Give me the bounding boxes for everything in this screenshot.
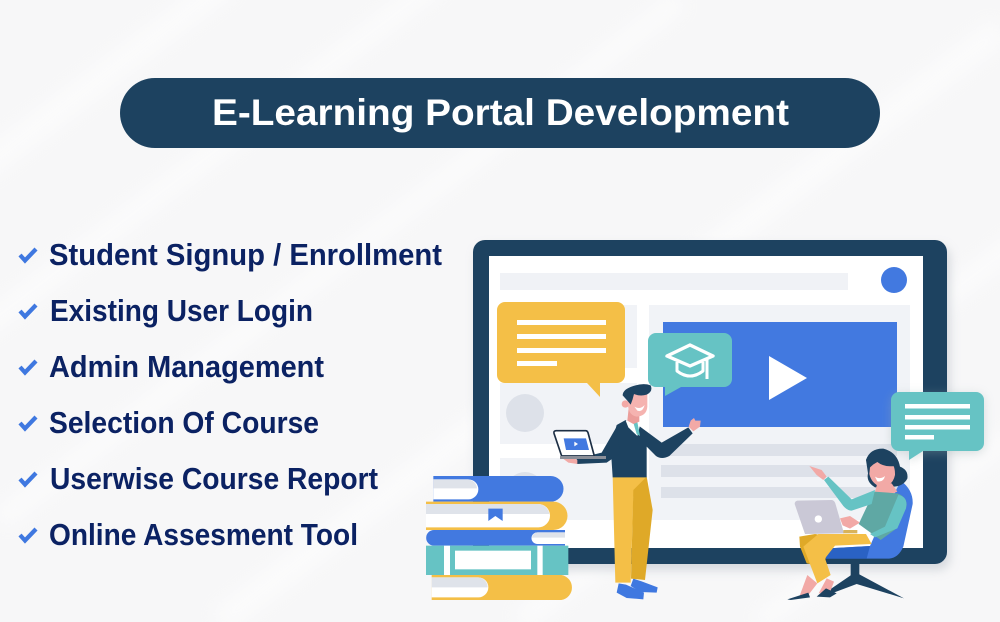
yellow speech bubble <box>497 302 625 397</box>
item: userwise course report: Userwise Course Report <box>50 461 378 496</box>
sleeve <box>824 477 906 537</box>
video player <box>663 322 897 427</box>
woman in chair <box>787 449 913 600</box>
main panel <box>649 305 910 520</box>
torso <box>859 492 907 540</box>
item: admin management: Admin Management <box>49 349 324 384</box>
title banner <box>120 78 880 148</box>
placeholder circles <box>506 394 544 510</box>
typing hand <box>840 516 860 529</box>
book: yellow bottom <box>432 575 572 600</box>
icon: graduation cap <box>667 345 713 379</box>
left panels <box>500 305 637 520</box>
title: E-Learning Portal Development <box>212 92 789 133</box>
avatar dot <box>881 267 907 293</box>
chair base <box>828 557 904 598</box>
item: selection of course: Selection Of Course <box>49 405 319 440</box>
item: online assessment tool: Online Assesment Tool <box>49 517 358 552</box>
chair seat <box>824 546 870 559</box>
neck and head <box>869 460 897 497</box>
man with laptop <box>554 384 701 599</box>
shoes <box>617 579 658 599</box>
item: existing user login: Existing User Login <box>50 293 313 328</box>
trousers <box>613 477 653 583</box>
hair back <box>866 449 908 487</box>
feature list <box>20 237 442 552</box>
text lines <box>661 444 897 498</box>
feet and shoes <box>787 575 837 600</box>
smile <box>875 476 885 482</box>
book: blue top <box>433 476 563 502</box>
book: yellow with bookmark <box>426 502 567 530</box>
hand <box>561 418 701 464</box>
book: blue thin <box>426 530 565 546</box>
hair front <box>866 451 895 467</box>
legs <box>799 534 872 583</box>
laptop <box>795 500 857 534</box>
pointing hand <box>809 466 827 480</box>
laptop <box>554 431 606 459</box>
top bar <box>500 273 848 290</box>
chair <box>824 481 913 559</box>
head and hair <box>622 384 651 424</box>
teal speech bubble with graduation cap <box>648 333 732 396</box>
item: student signup: Student Signup / Enrollment <box>49 237 442 272</box>
shirt and tie <box>626 419 640 436</box>
monitor <box>473 240 950 570</box>
book: teal <box>426 546 568 575</box>
teal speech bubble right <box>891 392 984 462</box>
torso and arms <box>577 420 693 477</box>
book stack <box>426 476 572 600</box>
